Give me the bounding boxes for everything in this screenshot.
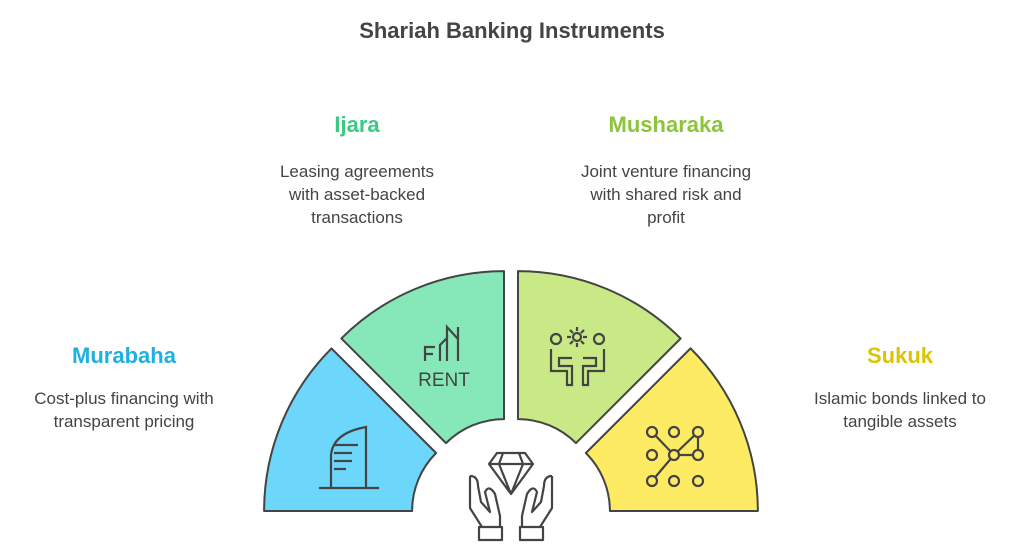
text: Murabaha bbox=[34, 389, 214, 431]
icon: rent bbox=[418, 327, 470, 391]
text: Ijara bbox=[280, 162, 434, 227]
icon: network bbox=[647, 427, 703, 486]
text: Ijara: Leasing agreements bbox=[280, 162, 434, 181]
text: Musharaka: with shared risk and bbox=[590, 185, 742, 204]
heading: Sukuk: Sukuk bbox=[867, 343, 933, 368]
segment: Sukuk bbox=[569, 348, 806, 560]
text: Sukuk: Islamic bonds linked to bbox=[814, 389, 986, 408]
text: Murabaha: transparent pricing bbox=[54, 412, 194, 431]
icon: hands with diamond bbox=[470, 453, 552, 540]
heading: Murabaha: Murabaha bbox=[72, 343, 176, 368]
heading: Musharaka: Musharaka bbox=[609, 112, 723, 137]
text: Musharaka: profit bbox=[647, 208, 685, 227]
text: Sukuk: tangible assets bbox=[843, 412, 957, 431]
heading: Ijara: Ijara bbox=[334, 112, 380, 137]
icon: building bbox=[319, 427, 379, 488]
title: Shariah Banking Instruments bbox=[359, 18, 665, 43]
text: Ijara: with asset-backed bbox=[289, 185, 425, 204]
segment: Musharaka bbox=[518, 271, 681, 443]
segment: Ijara bbox=[341, 223, 578, 460]
icon: rent: RENT bbox=[418, 370, 470, 391]
icon: partners bbox=[551, 327, 604, 385]
text: Sukuk bbox=[814, 389, 986, 431]
text: Murabaha: Cost-plus financing with bbox=[34, 389, 214, 408]
text: Ijara: transactions bbox=[311, 208, 403, 227]
text: Musharaka bbox=[581, 162, 751, 227]
segment: Murabaha bbox=[264, 348, 436, 511]
text: Musharaka: Joint venture financing bbox=[581, 162, 751, 181]
